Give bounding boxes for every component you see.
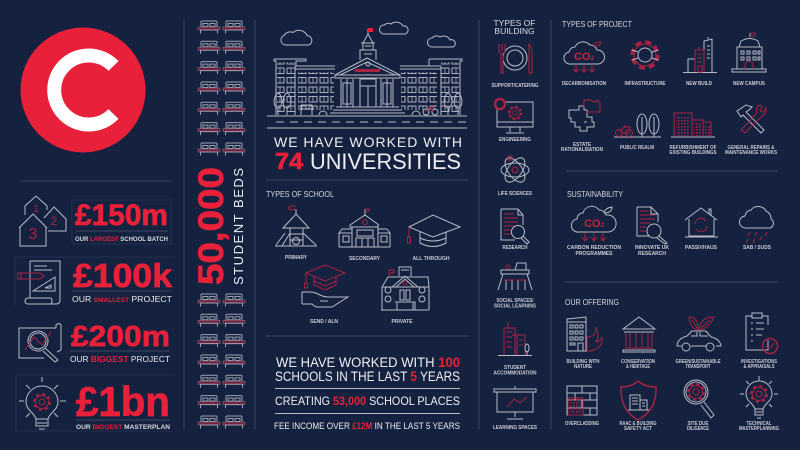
stats panel — [15, 196, 173, 431]
heading: OUR OFFERING — [565, 297, 619, 307]
label: LEARNING SPACES — [493, 425, 537, 431]
icon: private — [381, 267, 429, 310]
icon: decarbonisation — [564, 42, 605, 72]
label: SUPPORT/CATERING — [492, 83, 538, 89]
icon: houses 1 2 3: 2 — [51, 214, 58, 228]
callout: schools statistics — [274, 355, 460, 432]
label: PUBLIC REALM — [620, 145, 654, 151]
icon: carbon reduction — [571, 206, 616, 241]
stat: £150m: OUR LARGEST SCHOOL BATCH — [75, 237, 168, 243]
panel: sustainability — [567, 189, 773, 257]
icon: houses 1 2 3 — [19, 196, 66, 246]
label: INFRASTRUCTURE — [624, 81, 666, 87]
label: SECONDARY — [349, 256, 380, 262]
icon: sab suds — [739, 206, 773, 243]
icon: technical masterplanning — [740, 376, 778, 418]
stat: £100k: £100k — [73, 257, 173, 294]
label: SOCIAL SPACES/ — [496, 298, 534, 304]
label: RAAC & BUILDING — [620, 421, 656, 427]
icon: houses 1 2 3: 3 — [29, 226, 38, 243]
label: ESTATE — [573, 142, 591, 148]
icon: magnifier over map — [19, 324, 61, 362]
panel: our offering — [565, 297, 779, 432]
label: TRANSPORT — [686, 364, 711, 370]
label: RESEARCH — [502, 245, 528, 251]
callout: schools statistics: SCHOOLS IN THE LAST 5 YEARS — [275, 369, 460, 384]
heading: TYPES OF PROJECT — [562, 19, 632, 29]
stat: £1bn: OUR BIGGEST MASTERPLAN — [76, 424, 170, 431]
callout: schools statistics: WE HAVE WORKED WITH 100 — [276, 355, 460, 370]
icon: new campus — [732, 33, 766, 72]
icon: estate rationalisation — [569, 100, 600, 131]
icon: learning spaces — [494, 386, 536, 419]
university illustration — [267, 22, 467, 128]
icon: green transport — [677, 317, 721, 351]
stat: £150m: £150m — [75, 199, 168, 232]
headline: 74 universities: UNIVERSITIES — [310, 149, 461, 174]
label: SAB / SUDS — [743, 245, 771, 251]
logo — [20, 28, 146, 152]
headline: 74 universities: 74 — [275, 148, 303, 174]
stat: £1bn: £1bn — [76, 378, 170, 425]
label — [494, 298, 536, 310]
label — [670, 145, 717, 156]
icon: research — [501, 209, 529, 244]
label: & HERITAGE — [626, 364, 650, 370]
label — [741, 359, 777, 370]
icon: light bulb with gear — [19, 377, 66, 429]
panel: types of project — [561, 19, 777, 156]
icon: raac shield — [621, 381, 656, 420]
heading: BUILDING — [494, 26, 535, 36]
label: ACCOMMODATION — [494, 370, 537, 376]
stat: £200m — [70, 321, 170, 364]
icon: life sciences — [501, 155, 529, 185]
label — [620, 421, 656, 432]
icon: general repairs — [737, 105, 766, 133]
headline: 74 universities — [274, 134, 462, 174]
callout: schools statistics: CREATING 53,000 SCHOOL PLACES — [275, 394, 460, 408]
label — [621, 359, 655, 370]
icon: decarbonisation: CO2 — [574, 51, 595, 63]
label — [635, 245, 669, 257]
label: LIFE SCIENCES — [498, 191, 532, 197]
label: GREEN/SUSTAINABLE — [676, 359, 721, 365]
label: STUDENT — [504, 365, 527, 371]
label — [494, 365, 537, 376]
icon: all through — [408, 215, 460, 246]
panel: types of building — [492, 18, 538, 431]
stat: £200m: £200m — [71, 321, 170, 353]
label: SITE DUE — [688, 421, 709, 427]
beds lower — [198, 294, 245, 428]
label: DECARBONISATION — [562, 81, 606, 87]
label: INNOVATE UK — [635, 245, 669, 251]
label — [739, 421, 779, 432]
student beds column — [192, 21, 246, 428]
callout: schools statistics: FEE INCOME OVER £12M IN THE LAST 5 YEARS — [274, 421, 460, 432]
student beds label: STUDENT BEDS — [231, 168, 246, 285]
icon: plans with set square — [18, 261, 60, 304]
label: PROGRAMMES — [576, 251, 613, 257]
stat: £100k: OUR SMALLEST PROJECT — [72, 295, 172, 304]
label: PASSIVHAUS — [685, 245, 718, 251]
label: & APPRAISALS — [744, 364, 775, 370]
label: NEW CAMPUS — [733, 81, 765, 87]
label: CARBON REDUCTION — [567, 245, 621, 251]
icon: send / aln — [302, 265, 348, 307]
label — [561, 142, 603, 153]
label — [725, 145, 777, 156]
label: EXISTING BUILDINGS — [670, 150, 717, 156]
label: INVESTIGATIONS — [741, 359, 777, 365]
label — [567, 245, 621, 257]
icon: support catering — [499, 44, 532, 73]
label: GENERAL REPAIRS & — [728, 145, 775, 151]
label: MAINTENANCE WORKS — [725, 150, 777, 156]
heading: SUSTAINABILITY — [567, 189, 623, 199]
label: TECHNICAL — [746, 421, 772, 427]
label: MASTERPLANNING — [739, 426, 779, 432]
beds upper — [198, 21, 245, 156]
icon: site due diligence — [684, 380, 714, 418]
label: NEW BUILD — [686, 81, 712, 87]
label: PRIVATE — [392, 319, 413, 325]
icon: infrastructure — [632, 42, 658, 68]
icon: student accommodation — [498, 322, 532, 356]
icon: conservation — [623, 317, 655, 352]
label: ENGINEERING — [499, 137, 531, 143]
headline: 74 universities: WE HAVE WORKED WITH — [274, 134, 462, 150]
icon: overcladding — [567, 386, 597, 415]
label: ALL THROUGH — [412, 256, 450, 262]
icon: building with nature — [567, 317, 602, 351]
icon: investigations — [746, 313, 778, 354]
label: RATIONALISATION — [561, 147, 603, 153]
panel: types of school — [266, 189, 460, 325]
icon: primary — [275, 206, 317, 246]
stat: £200m: OUR BIGGEST PROJECT — [70, 355, 170, 364]
label: CONSERVATION — [621, 359, 655, 365]
label: BUILDING WITH — [566, 359, 600, 365]
icon: houses 1 2 3: 1 — [33, 204, 39, 215]
label: SAFETY ACT — [624, 426, 653, 432]
icon: public realm — [614, 114, 661, 137]
label: SEND / ALN — [310, 319, 338, 325]
icon: passivhaus — [685, 208, 718, 237]
label — [687, 421, 709, 432]
icon: engineering — [495, 99, 533, 133]
label: SOCIAL LEARNING — [494, 304, 536, 310]
icon: innovate research — [637, 207, 667, 244]
icon: social spaces — [498, 263, 532, 290]
label — [676, 359, 721, 370]
stat: £150m — [72, 199, 171, 244]
heading: TYPES OF SCHOOL — [266, 189, 334, 199]
icon: new build — [683, 37, 717, 72]
label: REFURBISHMENT OF — [670, 145, 716, 151]
icon: refurbishment — [671, 113, 715, 137]
label: NATURE — [574, 364, 592, 370]
stat: £100k — [15, 257, 173, 305]
label: OVERCLADDING — [565, 421, 599, 427]
icon: secondary — [339, 209, 390, 247]
label: PRIMARY — [285, 255, 307, 261]
heading: TYPES OF — [493, 18, 536, 28]
50,000 figure: 50,000 — [192, 167, 231, 285]
label: RESEARCH — [638, 251, 666, 257]
stat: £1bn — [16, 375, 172, 431]
label — [566, 359, 600, 370]
label: DILIGENCE — [687, 426, 709, 432]
icon: carbon reduction: CO2 — [584, 218, 605, 230]
